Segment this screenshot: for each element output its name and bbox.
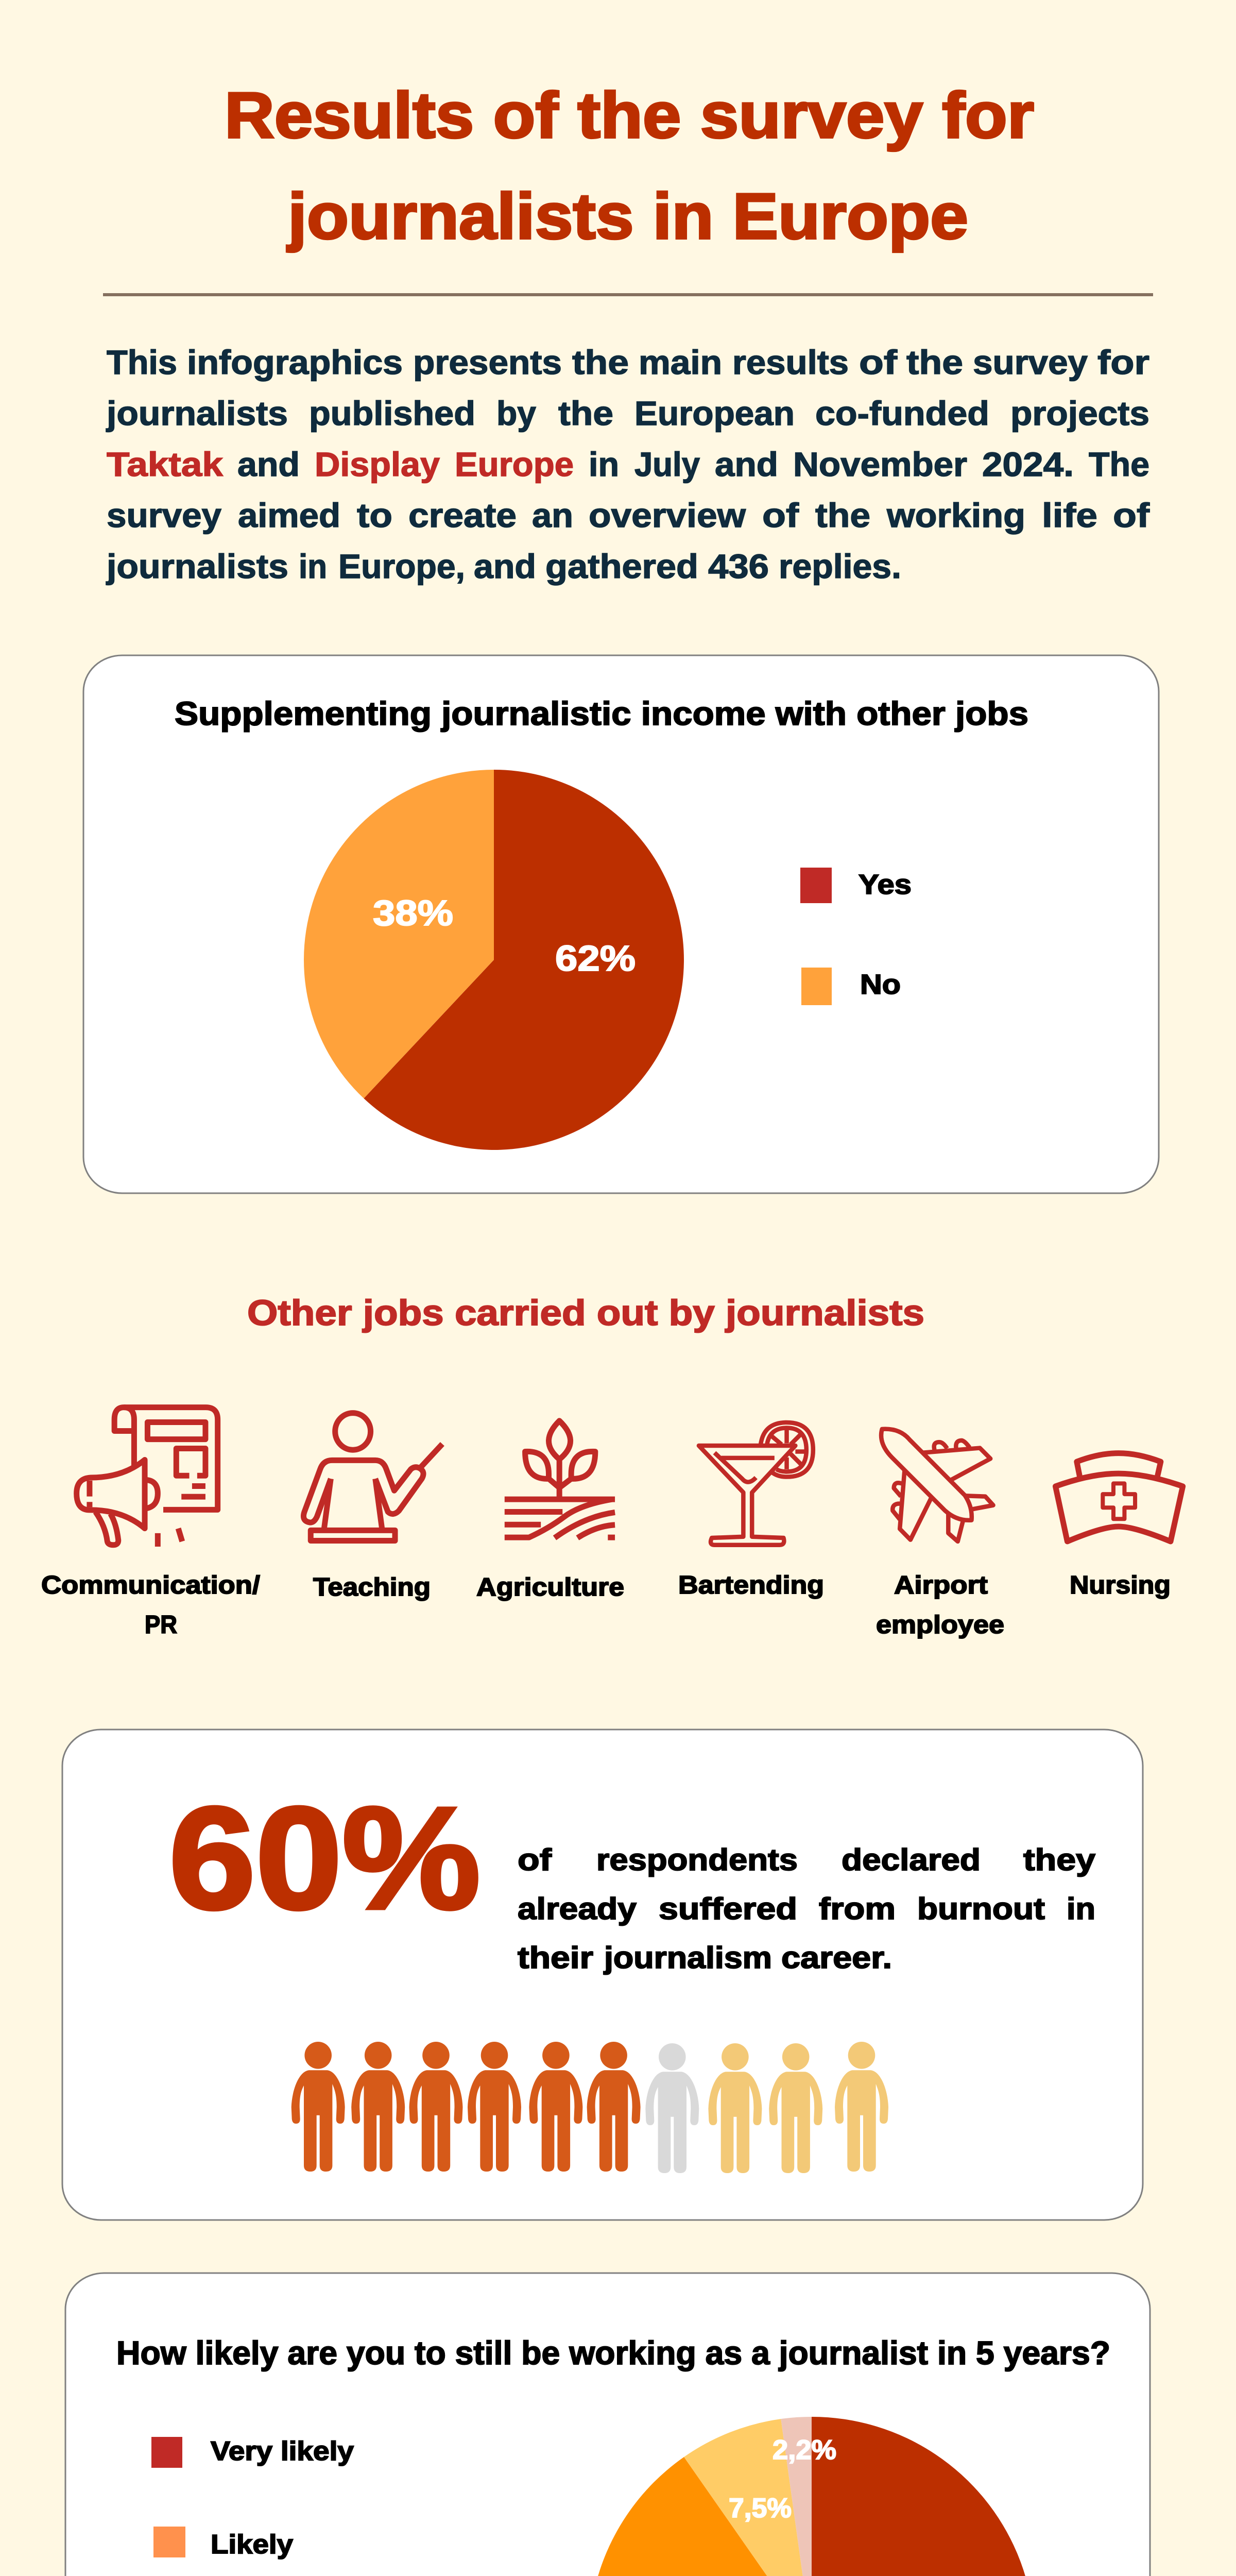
intro paragraph: create	[408, 496, 517, 534]
heading: likelihood: How likely are you to still be working as a journalist in 5 years?	[116, 2334, 1110, 2371]
label: airport employee: employee	[876, 1611, 1004, 1639]
intro paragraph: survey	[107, 496, 221, 534]
intro paragraph: presents	[413, 343, 562, 381]
label: airport employee: Airport	[894, 1571, 988, 1599]
burnout statement: declared	[842, 1843, 981, 1877]
intro paragraph: replies.	[779, 547, 901, 585]
intro paragraph: Taktak	[107, 445, 223, 483]
icon: bartending cocktail	[699, 1422, 813, 1545]
burnout statement: burnout	[917, 1892, 1045, 1926]
icon: agriculture	[505, 1421, 615, 1538]
intro paragraph: aimed	[238, 496, 340, 534]
intro paragraph: overview	[589, 496, 746, 534]
intro paragraph: of	[762, 496, 799, 534]
intro paragraph: The	[1089, 445, 1149, 483]
panel: likelihood in 5 years	[65, 2273, 1150, 2576]
burnout statement: suffered	[659, 1892, 797, 1926]
intro paragraph: main	[639, 343, 722, 381]
label: communication: PR	[145, 1611, 177, 1639]
legend: likelihood: Likely	[211, 2530, 293, 2560]
intro paragraph: projects	[1010, 394, 1149, 432]
intro paragraph: Europe,	[338, 547, 465, 585]
pie chart: other jobs: 38%	[373, 893, 453, 933]
label: airport employee	[876, 1571, 1004, 1639]
pie chart: other jobs: 62%	[555, 938, 636, 978]
intro paragraph: working	[886, 496, 1025, 534]
intro paragraph: journalists	[106, 547, 288, 585]
intro paragraph: 436	[708, 547, 769, 585]
pie chart: other jobs	[304, 770, 684, 1150]
burnout statement: their	[518, 1941, 593, 1975]
pie chart: likelihood: 7,5%	[729, 2493, 792, 2523]
intro paragraph: infographics	[187, 343, 403, 381]
label: communication	[41, 1571, 260, 1639]
intro paragraph: the	[558, 394, 613, 432]
intro paragraph: of	[1113, 496, 1150, 534]
intro paragraph: to	[357, 496, 392, 534]
title: Results of the survey for	[225, 79, 1034, 151]
intro paragraph: Display	[315, 445, 440, 483]
intro paragraph: published	[309, 394, 475, 432]
legend: yes / no: No	[860, 969, 901, 1000]
burnout statement: already	[518, 1892, 637, 1926]
intro paragraph: the	[906, 343, 963, 381]
intro paragraph: the	[572, 343, 629, 381]
burnout statement: of	[518, 1843, 552, 1877]
intro paragraph	[106, 343, 1150, 585]
intro paragraph: and	[237, 445, 300, 483]
intro paragraph: life	[1042, 496, 1097, 534]
icon: airplane	[881, 1429, 993, 1541]
burnout statement	[518, 1843, 1095, 1975]
title: journalists in Europe	[287, 180, 968, 252]
burnout statement: from	[819, 1892, 896, 1926]
intro paragraph: co-funded	[815, 394, 989, 432]
intro paragraph: for	[1097, 343, 1149, 381]
label: agriculture: Agriculture	[476, 1573, 624, 1601]
burnout statement: in	[1067, 1892, 1095, 1926]
pie chart: likelihood: 2,2%	[772, 2435, 836, 2465]
panel: supplementing income	[83, 655, 1159, 1193]
intro paragraph: survey	[973, 343, 1088, 381]
intro paragraph: and	[474, 547, 536, 585]
big number: 60%: 60%	[169, 1777, 480, 1939]
intro paragraph: in	[589, 445, 619, 483]
intro paragraph: November	[793, 445, 967, 483]
intro paragraph: an	[532, 496, 573, 534]
icon: communication megaphone and newspaper	[77, 1408, 218, 1547]
label: bartending: Bartending	[678, 1571, 824, 1599]
panel: burnout	[62, 1730, 1143, 2220]
intro paragraph: the	[815, 496, 870, 534]
burnout statement: they	[1023, 1843, 1095, 1877]
intro paragraph: gathered	[545, 547, 698, 585]
legend: likelihood: Very likely	[211, 2436, 354, 2466]
burnout statement: journalism	[604, 1941, 772, 1975]
label: nursing: Nursing	[1070, 1571, 1171, 1599]
intro paragraph: journalists	[106, 394, 288, 432]
pie chart: likelihood	[589, 2417, 1035, 2576]
icon: nursing cap	[1055, 1453, 1183, 1541]
intro paragraph: 2024.	[982, 445, 1074, 483]
label: communication: Communication/	[41, 1571, 260, 1599]
pictogram: ten people, six burned out	[291, 2042, 888, 2173]
intro paragraph: results	[732, 343, 849, 381]
heading: supplementing income: Supplementing journalistic income with other jobs	[175, 695, 1028, 732]
intro paragraph: of	[859, 343, 898, 381]
icon: teaching	[303, 1413, 442, 1541]
intro paragraph: in	[299, 547, 327, 585]
heading: other jobs: Other jobs carried out by journalists	[247, 1293, 924, 1333]
intro paragraph: July	[634, 445, 700, 483]
legend: yes / no: Yes	[859, 869, 912, 900]
title	[225, 79, 1034, 252]
intro paragraph: European	[634, 394, 795, 432]
burnout statement: career.	[781, 1941, 892, 1975]
intro paragraph: by	[496, 394, 536, 432]
intro paragraph: This	[107, 343, 177, 381]
legend: likelihood	[151, 2436, 399, 2576]
label: teaching: Teaching	[313, 1573, 431, 1601]
burnout statement: respondents	[596, 1843, 798, 1877]
legend: yes / no	[800, 868, 912, 1005]
intro paragraph: and	[715, 445, 778, 483]
intro paragraph: Europe	[455, 445, 574, 483]
